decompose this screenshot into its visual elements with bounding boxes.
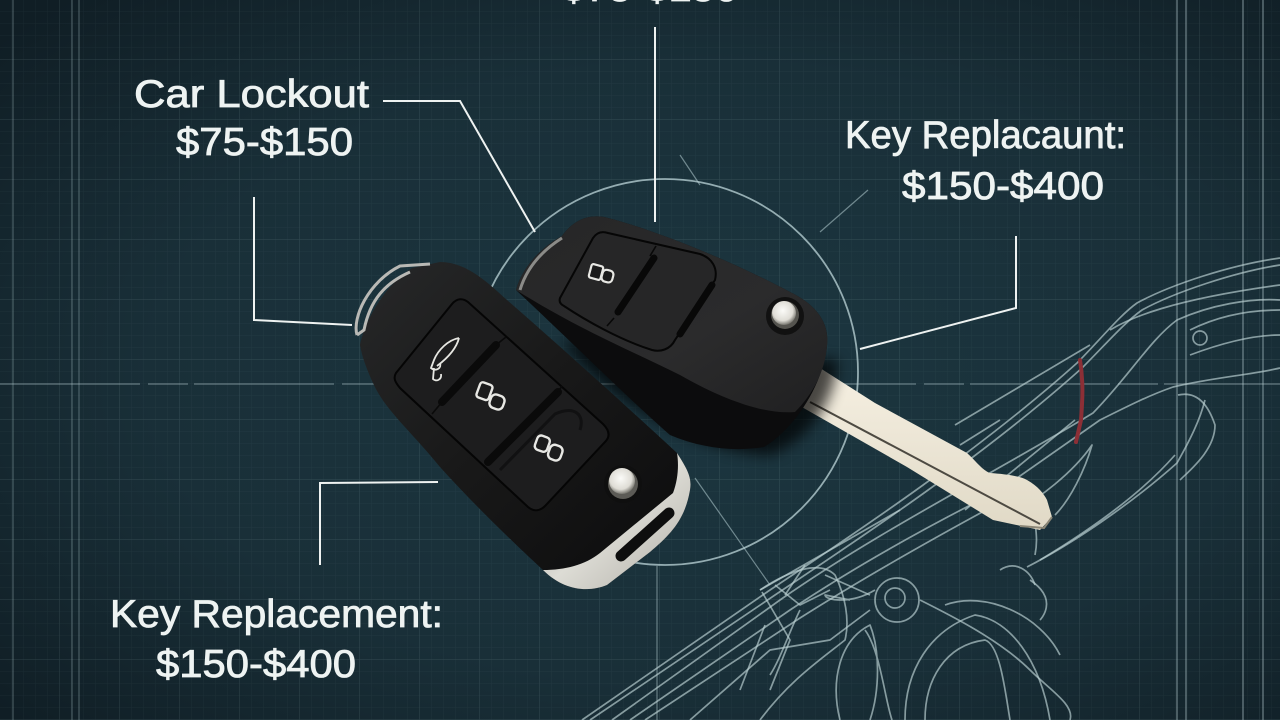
leader: left bracket (254, 197, 352, 325)
front fob icon: car trunk (431, 338, 459, 380)
front fob icon: unlock (534, 434, 564, 462)
front fob chrome ring (356, 264, 430, 335)
red pencil mark (1076, 360, 1082, 442)
label: key replacement bottom: $150-$400 (156, 643, 356, 686)
label: car lockout (134, 73, 369, 164)
technical circle drawing (472, 155, 868, 720)
label: key replacement bottom (110, 593, 443, 686)
front fob button panel (395, 299, 609, 510)
rear fob button panel (560, 232, 716, 351)
label: car lockout: Car Lockout (134, 73, 369, 116)
leader: top price (654, 27, 656, 222)
label: key replacement right: $150-$400 (902, 165, 1104, 208)
label: key replacement bottom: Key Replacement: (110, 593, 443, 636)
label: key replacement right (845, 114, 1126, 208)
key fob: rear (516, 216, 838, 455)
front fob icon: lock (476, 381, 506, 411)
front fob slot (621, 513, 669, 556)
car chassis sketch (582, 258, 1280, 720)
label: key replacement right: Key Replacaunt: (845, 114, 1126, 157)
front fob chrome end cap (543, 453, 690, 589)
label: car lockout: $75-$150 (176, 121, 353, 164)
front fob metal stud (604, 465, 642, 503)
key fob: front (356, 262, 690, 589)
callout lines (254, 27, 1016, 565)
leader: car lockout (383, 101, 535, 232)
rear fob metal stud (766, 297, 804, 335)
key blade (793, 368, 1052, 530)
rear fob lock icon (588, 264, 614, 283)
leader: right key replacement (860, 236, 1016, 349)
leader: bottom key replacement (320, 482, 438, 565)
